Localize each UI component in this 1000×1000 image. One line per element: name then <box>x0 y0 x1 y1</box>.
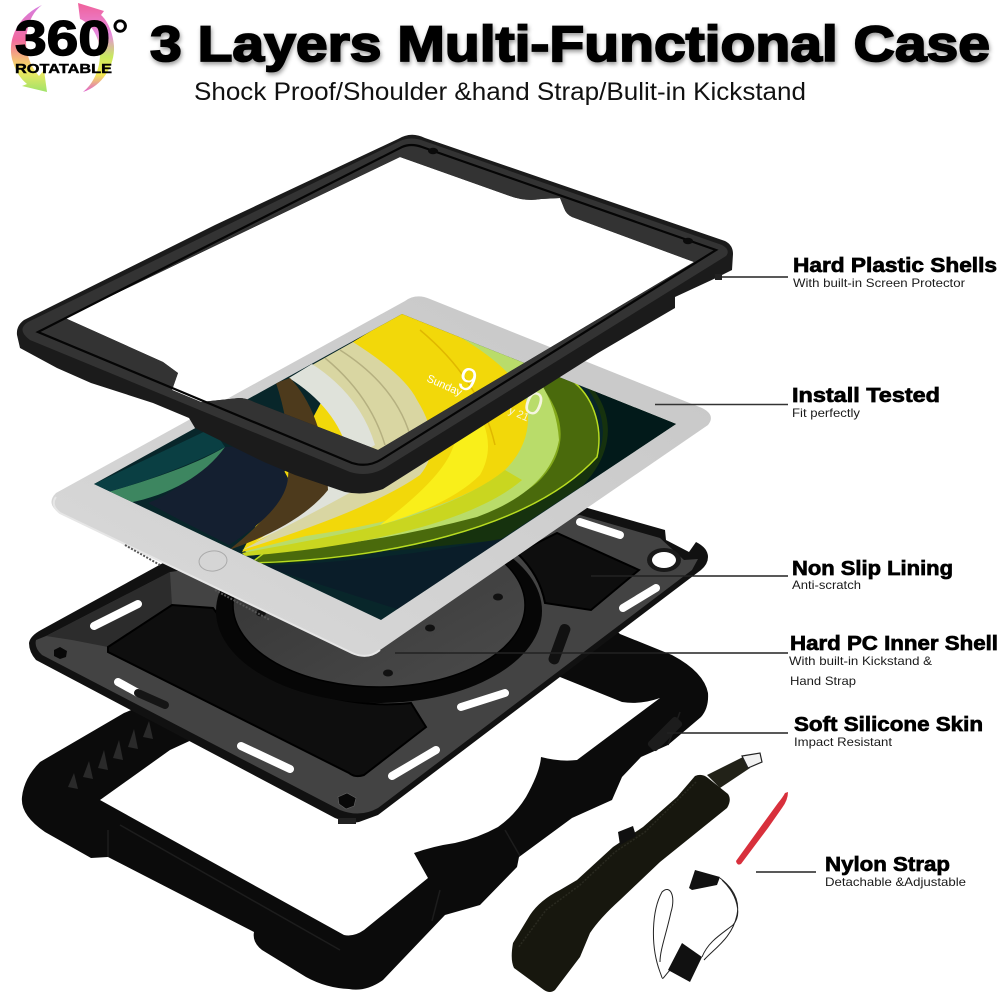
label: hard PC inner shell: With built-in Kickstand & <box>789 654 932 668</box>
hand lanyard cord <box>653 878 738 978</box>
frame clip right <box>715 274 722 280</box>
wallpaper: bottom dark texture <box>266 538 504 610</box>
label: soft silicone skin <box>794 714 983 749</box>
wallpaper: white folds <box>255 364 375 542</box>
badge number: 360 <box>15 12 110 66</box>
camera hole <box>647 548 681 572</box>
label: non slip lining: Anti-scratch <box>792 578 861 592</box>
frame black groove <box>38 145 716 465</box>
soft silicone skin layer <box>22 622 708 990</box>
tablet <box>51 296 711 656</box>
tablet lower edge <box>54 497 380 656</box>
hard PC inner shell layer <box>29 507 708 824</box>
strap tab <box>618 826 636 845</box>
lock screen clock minute: 0 <box>519 383 548 423</box>
slot shadow <box>138 693 165 705</box>
kickstand slot <box>547 623 572 666</box>
icon: 360 degree rotatable badge <box>11 3 129 92</box>
shell grey surface <box>36 515 698 814</box>
red pry tool <box>736 792 788 865</box>
label: soft silicone skin: Impact Resistant <box>794 735 893 749</box>
rotating ring <box>216 519 542 703</box>
camera opening <box>652 552 676 568</box>
label: nylon strap <box>825 854 966 889</box>
large black lining pad <box>108 605 426 776</box>
corner screw left <box>54 647 67 659</box>
label: nylon strap: Nylon Strap <box>825 854 950 876</box>
hard plastic shell frame layer <box>17 135 733 493</box>
badge caption: ROTATABLE <box>15 61 112 76</box>
bottom clip <box>338 818 356 824</box>
frame top surface <box>22 138 728 474</box>
wallpaper: lime band <box>245 350 561 553</box>
label: hard plastic shells <box>793 255 997 290</box>
label: hard PC inner shell: Hard PC Inner Shell <box>790 633 998 655</box>
wallpaper: yellow-green strip <box>242 470 522 556</box>
lock screen clock hour: 6 <box>453 359 482 399</box>
icon: right rainbow arrow <box>78 3 114 92</box>
disc screw holes <box>256 594 503 676</box>
label: nylon strap: Detachable &Adjustable <box>825 875 966 889</box>
shell base <box>29 507 708 822</box>
lock screen date number: y 21 <box>507 405 531 424</box>
lanyard clip upper <box>689 870 720 890</box>
strap buckle <box>742 753 762 768</box>
label: hard plastic shells: With built-in Screen Protector <box>793 276 965 290</box>
leader: soft silicone skin <box>667 732 788 734</box>
label: install tested <box>792 385 940 420</box>
wallpaper: navy shape <box>148 445 288 545</box>
lanyard clip lower <box>668 943 702 982</box>
wallpaper: light green top <box>245 337 559 552</box>
label: hard plastic shells: Hard Plastic Shells <box>793 255 997 277</box>
corner screw bottom <box>338 793 356 809</box>
wallpaper: green shape <box>108 447 225 503</box>
shoulder pad <box>512 775 730 992</box>
label: install tested: Install Tested <box>792 385 940 407</box>
leader: hard plastic shells <box>719 276 788 278</box>
small black lining pad <box>517 533 639 610</box>
label: hard PC inner shell <box>789 633 998 688</box>
wallpaper: fold lines <box>325 330 495 445</box>
icon: left rainbow arrow <box>11 5 47 92</box>
lock screen date: Sunday <box>425 373 464 399</box>
strap slots <box>94 522 656 776</box>
wallpaper: cream folds <box>242 342 432 550</box>
wallpaper: right black panel <box>581 391 676 488</box>
wallpaper: olive band <box>251 350 599 563</box>
leader lines <box>395 277 816 872</box>
degree mark: ° <box>111 10 129 62</box>
silicone grip texture <box>68 721 153 789</box>
wallpaper: dark green <box>251 380 676 565</box>
silicone side button <box>647 716 683 752</box>
shoulder pad stitching <box>518 782 696 948</box>
subtitle: Shock Proof/Shoulder &hand Strap/Bulit-in Kickstand <box>194 78 806 106</box>
tablet body <box>51 296 711 656</box>
home button <box>198 550 228 572</box>
tablet wallpaper <box>90 310 680 625</box>
label: hard PC inner shell: Hand Strap <box>790 674 856 688</box>
label: non slip lining: Non Slip Lining <box>792 558 953 580</box>
leader: non slip lining <box>591 575 788 577</box>
frame outer wall <box>17 135 733 493</box>
frame screw holes <box>428 148 693 244</box>
label: soft silicone skin: Soft Silicone Skin <box>794 714 983 736</box>
nylon strap accessories <box>512 753 788 992</box>
wallpaper: brown band <box>229 378 328 550</box>
silicone seam details <box>108 712 680 950</box>
wallpaper: bright yellow band <box>380 425 488 525</box>
label: install tested: Fit perfectly <box>792 406 860 420</box>
label: non slip lining <box>792 558 953 592</box>
leader: hard PC inner shell <box>395 652 788 654</box>
wallpaper: yellow <box>242 312 528 552</box>
title: 3 Layers Multi-Functional Case <box>150 16 990 72</box>
shell dark upper band <box>46 572 172 647</box>
rotating disc <box>233 523 525 687</box>
tablet speaker grille <box>125 545 270 620</box>
wallpaper: teal shape <box>94 428 225 492</box>
leader: install tested <box>655 404 788 406</box>
strap webbing <box>707 757 750 788</box>
leader: nylon strap <box>756 871 816 873</box>
